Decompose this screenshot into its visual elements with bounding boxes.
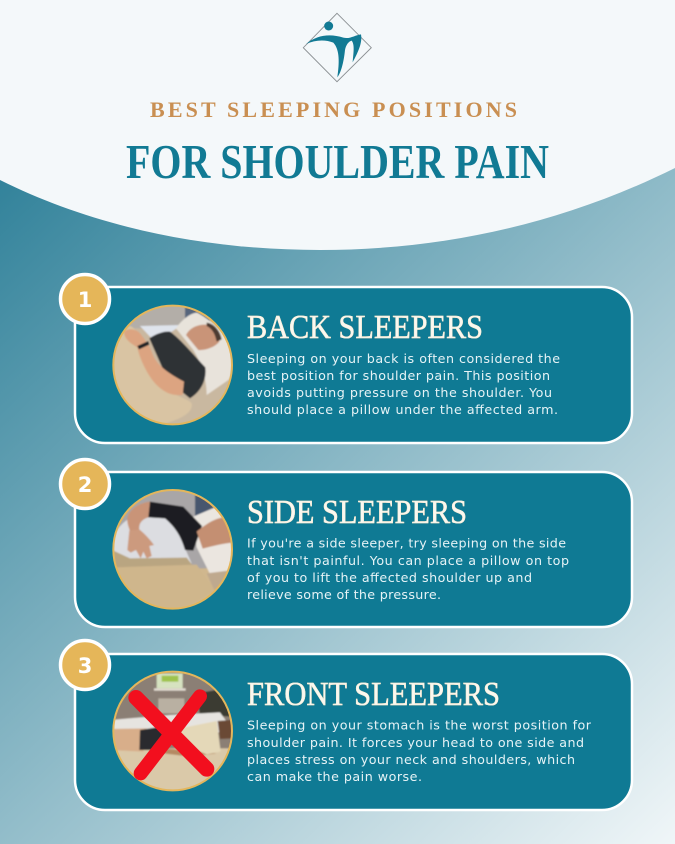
body text: can make the pain worse.	[247, 769, 422, 784]
heading: BACK SLEEPERS	[247, 309, 483, 346]
body text: of you to lift the affected shoulder up and	[247, 570, 532, 585]
card background	[75, 472, 632, 627]
body text: should place a pillow under the affected arm.	[247, 402, 558, 417]
number badge 3	[60, 640, 110, 690]
body text: that isn't painful. You can place a pillow on top	[247, 553, 569, 568]
photo: man sleeping on back	[110, 303, 237, 430]
logo diamond outline	[303, 13, 371, 82]
body text: Sleeping on your back is often considered the	[247, 351, 560, 366]
body text: best position for shoulder pain. This position	[247, 368, 550, 383]
heading: FRONT SLEEPERS	[247, 676, 500, 713]
body text: If you're a side sleeper, try sleeping on the side	[247, 536, 566, 550]
red cross mark	[136, 696, 207, 773]
heading: SIDE SLEEPERS	[247, 494, 467, 531]
body text	[247, 718, 592, 784]
card background	[75, 287, 632, 443]
logo	[303, 13, 371, 82]
number badge 1: 1	[78, 288, 92, 312]
subtitle: BEST SLEEPING POSITIONS	[150, 97, 517, 122]
body text	[247, 351, 560, 417]
number badge 2	[60, 460, 110, 508]
number badge 2: 2	[78, 473, 92, 497]
body text: avoids putting pressure on the shoulder. You	[247, 385, 552, 400]
body text: Sleeping on your stomach is the worst position for	[247, 718, 592, 732]
logo figure	[306, 21, 361, 77]
photo: man sleeping on stomach with red cross	[110, 668, 237, 795]
body text: places stress on your neck and shoulders, which	[247, 752, 575, 767]
header curved panel	[0, 0, 675, 250]
body text: shoulder pain. It forces your head to one side and	[247, 735, 584, 750]
body text: relieve some of the pressure.	[247, 587, 441, 602]
number badge 3: 3	[78, 654, 92, 678]
photo: man sleeping on side	[110, 487, 237, 613]
number badge 1	[60, 274, 110, 324]
panel: back sleepers	[60, 274, 632, 443]
card background	[75, 654, 632, 810]
main title: FOR SHOULDER PAIN	[126, 134, 549, 189]
panel: front sleepers	[60, 640, 632, 810]
panel: side sleepers	[60, 460, 632, 627]
body text	[247, 536, 569, 602]
